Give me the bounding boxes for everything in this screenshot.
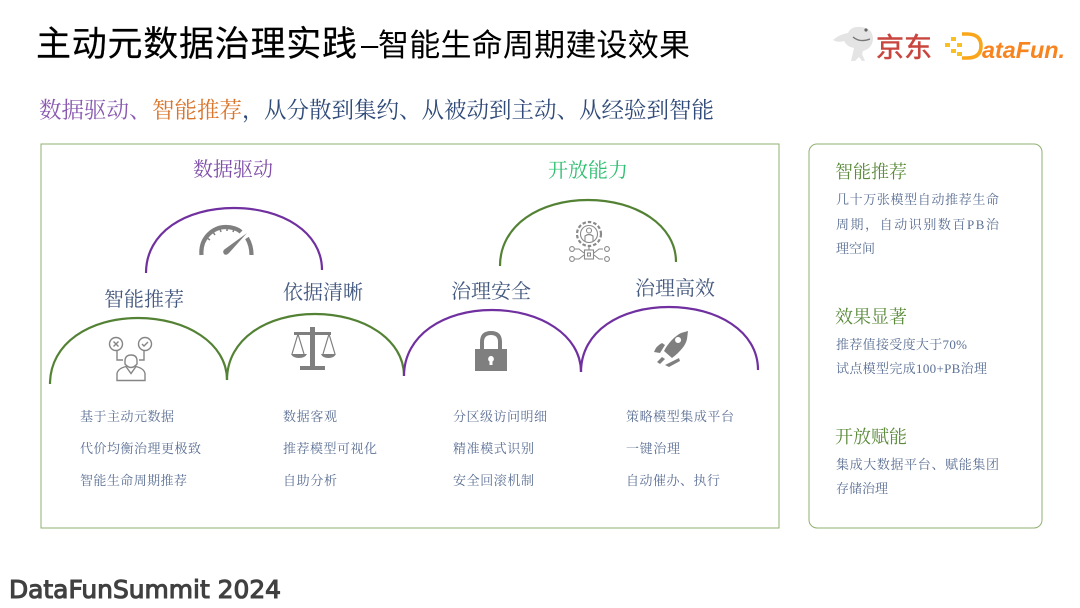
icon: lock bbox=[475, 333, 507, 371]
side block: open enablement: 存储治理 bbox=[836, 481, 888, 496]
list: governance efficiency: 策略模型集成平台 bbox=[626, 409, 734, 424]
subtitle: 智能推荐 bbox=[152, 98, 242, 123]
subtitle: 从分散到集约、从被动到主动、从经验到智能 bbox=[264, 98, 714, 123]
side block: open enablement bbox=[835, 427, 999, 496]
icon: person with choices bbox=[110, 338, 152, 380]
list: clear basis: 数据客观 bbox=[283, 409, 337, 424]
side block: notable effect: 推荐值接受度大于70% bbox=[836, 337, 967, 352]
list: governance efficiency bbox=[626, 409, 734, 488]
panel: side frame bbox=[809, 144, 1042, 528]
logo: DataFun: ataFun. bbox=[982, 37, 1065, 63]
footer brand: DataFunSummit 2024 bbox=[9, 575, 281, 604]
icon: scales bbox=[291, 327, 336, 370]
side block: smart recommendation: 几十万张模型自动推荐生命 bbox=[836, 192, 999, 207]
title: 主动元数据治理实践 bbox=[36, 25, 357, 64]
list: smart recommendation bbox=[80, 409, 201, 488]
heading: data driven: 数据驱动 bbox=[193, 158, 273, 181]
list: governance security: 安全回滚机制 bbox=[453, 473, 534, 488]
logo: JD: 京东 bbox=[876, 33, 932, 63]
list: governance security: 分区级访问明细 bbox=[453, 409, 547, 424]
title: – bbox=[361, 27, 379, 62]
side block: smart recommendation: 周期，自动识别数百PB治 bbox=[836, 217, 1000, 233]
logo: DataFun bbox=[945, 34, 1065, 63]
arc: governance security bbox=[404, 310, 581, 376]
label: governance efficiency: 治理高效 bbox=[635, 277, 715, 300]
side block: smart recommendation: 智能推荐 bbox=[835, 162, 907, 182]
side block: notable effect: 试点模型完成100+PB治理 bbox=[836, 361, 987, 376]
list: clear basis bbox=[283, 409, 377, 488]
side block: smart recommendation: 理空间 bbox=[836, 241, 875, 256]
label: smart recommendation: 智能推荐 bbox=[104, 288, 184, 311]
list: governance security: 精准模式识别 bbox=[453, 441, 534, 456]
list: governance security bbox=[453, 409, 547, 488]
icon: rocket bbox=[654, 331, 688, 367]
side block: notable effect bbox=[835, 307, 987, 376]
list: governance efficiency: 一键治理 bbox=[626, 441, 680, 456]
arc: smart recommendation bbox=[50, 318, 227, 384]
title: 智能生命周期建设效果 bbox=[378, 28, 690, 63]
list: clear basis: 推荐模型可视化 bbox=[283, 441, 377, 456]
icon: gear and network bbox=[570, 222, 609, 261]
side block: notable effect: 效果显著 bbox=[835, 307, 907, 327]
arc: open capability bbox=[500, 200, 676, 266]
arc: clear basis bbox=[227, 314, 404, 380]
label: clear basis: 依据清晰 bbox=[283, 281, 363, 304]
side block: smart recommendation bbox=[835, 162, 1000, 256]
heading: open capability: 开放能力 bbox=[548, 159, 628, 182]
arc: governance efficiency bbox=[581, 307, 758, 372]
side block: open enablement: 集成大数据平台、赋能集团 bbox=[836, 457, 999, 472]
logo: JD bbox=[833, 27, 932, 63]
subtitle: ， bbox=[242, 98, 265, 124]
icon: gauge bbox=[201, 227, 252, 255]
side block: open enablement: 开放赋能 bbox=[835, 427, 907, 447]
list: governance efficiency: 自动催办、执行 bbox=[626, 473, 720, 488]
title bbox=[36, 25, 690, 64]
arc: data driven bbox=[146, 208, 322, 273]
subtitle: 数据驱动、 bbox=[39, 98, 152, 123]
label: governance security: 治理安全 bbox=[451, 280, 531, 303]
panel: main frame bbox=[41, 144, 779, 528]
list: clear basis: 自助分析 bbox=[283, 473, 337, 488]
list: smart recommendation: 代价均衡治理更极致 bbox=[80, 441, 201, 456]
list: smart recommendation: 智能生命周期推荐 bbox=[80, 473, 187, 488]
list: smart recommendation: 基于主动元数据 bbox=[80, 409, 174, 424]
